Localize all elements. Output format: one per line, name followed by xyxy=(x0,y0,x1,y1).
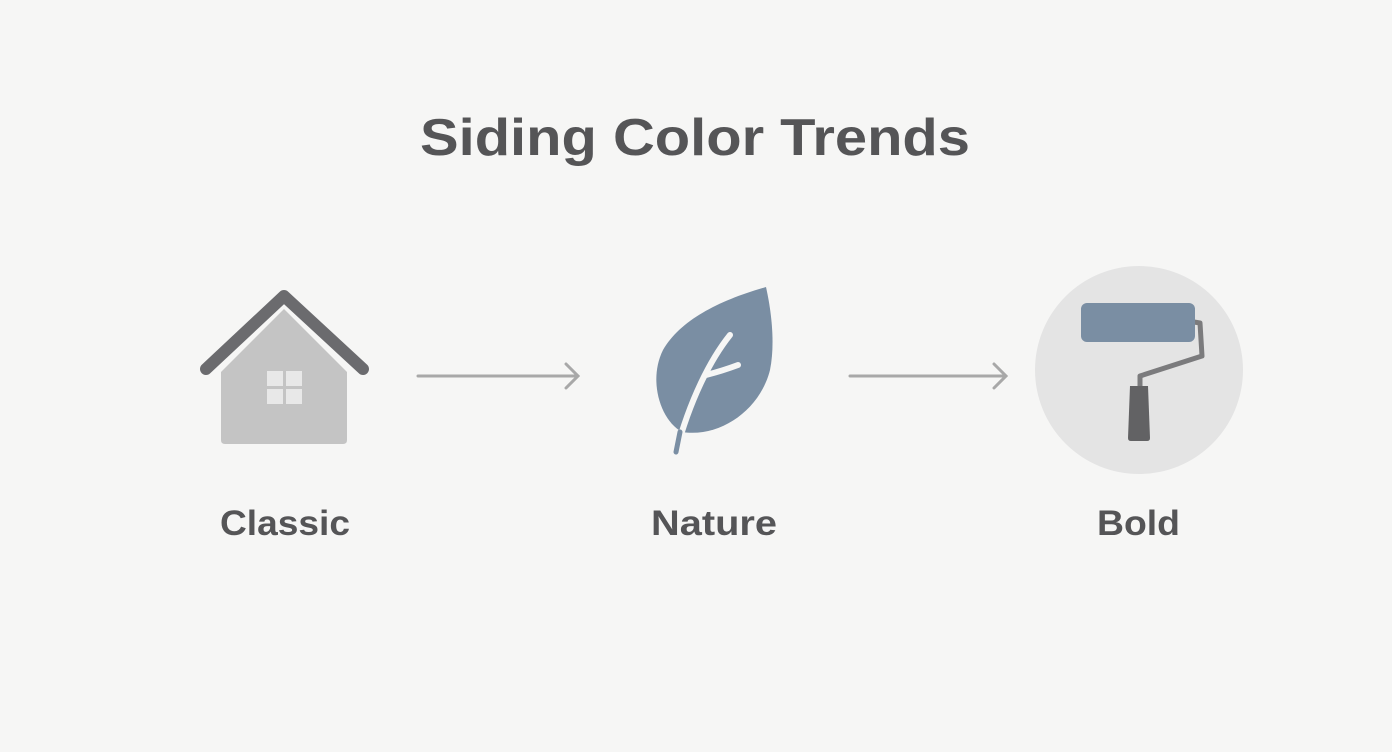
arrow 1 xyxy=(418,364,578,388)
icon: house xyxy=(206,296,363,444)
arrow 2 xyxy=(850,364,1006,388)
label: Bold: Bold xyxy=(1097,504,1180,543)
label: Classic: Classic xyxy=(220,504,350,543)
title: Siding Color Trends xyxy=(420,109,970,167)
icon: paint roller xyxy=(1035,266,1243,474)
icon: leaf xyxy=(656,287,773,452)
label: Nature: Nature xyxy=(651,504,777,543)
